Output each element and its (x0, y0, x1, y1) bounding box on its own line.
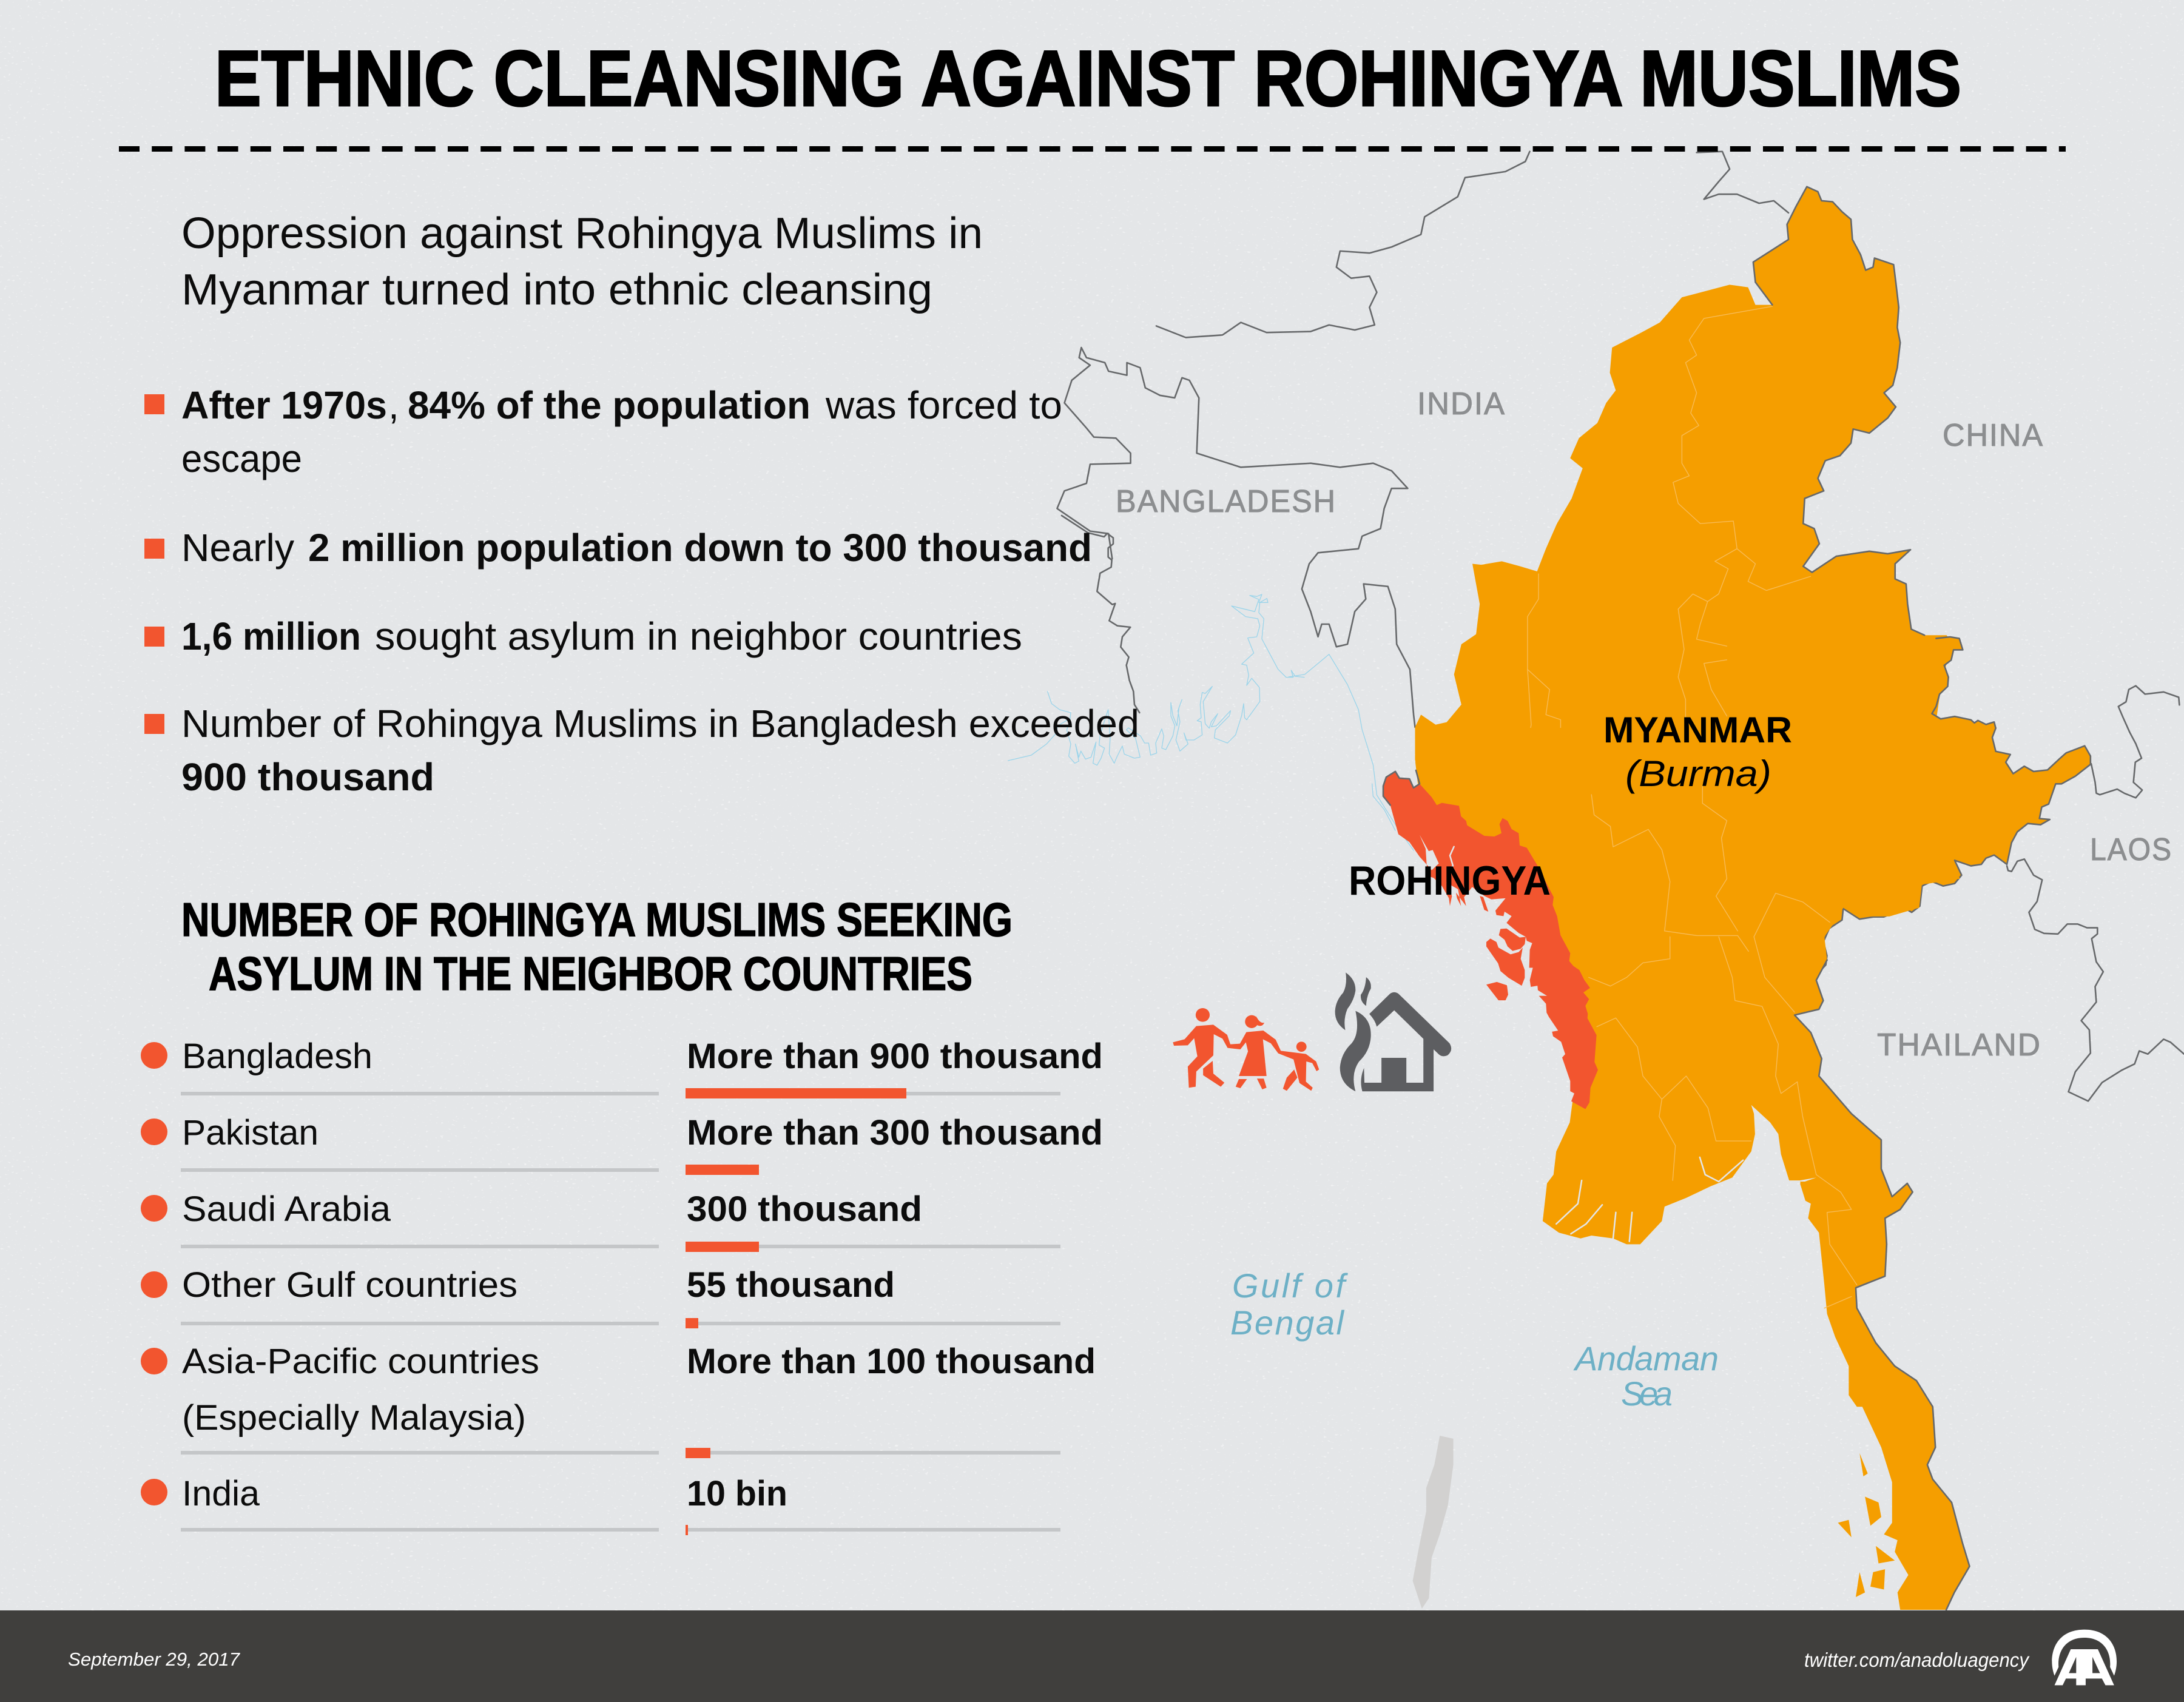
label: Myanmar: MYANMAR (1603, 710, 1792, 750)
row: Other Gulf countries: 55 thousand (687, 1265, 895, 1305)
row: Pakistan (141, 1113, 1103, 1175)
bullet: sought asylum: sought asylum in neighbor countries (375, 614, 1022, 658)
row: Saudi Arabia: 300 thousand (687, 1189, 922, 1229)
icon: burning house (1335, 972, 1451, 1091)
bullet: 84 percent forced to escape: After 1970s (181, 383, 387, 427)
label: Gulf of Bengal: Bengal (1230, 1303, 1345, 1342)
bullet: 84 percent forced to escape: escape (181, 437, 302, 480)
row: Pakistan: Pakistan (182, 1113, 318, 1152)
row: Other Gulf countries: Other Gulf countries (182, 1265, 517, 1305)
row: Other Gulf countries (141, 1265, 1060, 1328)
footer bar (0, 1610, 2184, 1702)
label: Burma: (Burma) (1625, 753, 1771, 794)
map (1008, 152, 2184, 1610)
footer date: September 29, 2017 (68, 1649, 241, 1670)
table heading: ASYLUM IN THE NEIGHBOR COUNTRIES (209, 947, 972, 1000)
row: Saudi Arabia: Saudi Arabia (182, 1189, 391, 1229)
icon: fleeing family (1173, 1008, 1319, 1091)
Rakhine coast water line (1289, 654, 1414, 850)
footer twitter handle: twitter.com/anadoluagency (1804, 1649, 2030, 1671)
label: Gulf of Bengal: Gulf of (1232, 1266, 1348, 1305)
icon: AA logo (2052, 1630, 2117, 1685)
label: India: INDIA (1417, 386, 1506, 422)
bullet: 84 percent forced to escape: was forced to (825, 383, 1062, 427)
row: Saudi Arabia (141, 1189, 1060, 1252)
Myanmar south (1413, 728, 1969, 1610)
row: Asia-Pacific countries: (Especially Malaysia) (182, 1398, 526, 1438)
row: India: 10 bin (687, 1474, 787, 1513)
row: Bangladesh: Bangladesh (182, 1037, 372, 1076)
row: Pakistan: More than 300 thousand (687, 1113, 1103, 1152)
bullet: Bangladesh number: 900 thousand (181, 755, 434, 799)
bullet: 84 percent forced to escape: , (388, 383, 399, 427)
label: Andaman Sea (1573, 1339, 1719, 1413)
label: Laos: LAOS (2090, 832, 2172, 867)
label: Gulf of Bengal (1230, 1266, 1348, 1342)
label: Rohingya: ROHINGYA (1349, 858, 1551, 904)
label: Andaman Sea: Andaman (1573, 1339, 1719, 1377)
Rohingya region in Rakhine (1372, 770, 1598, 1109)
bullet: population down: Nearly (181, 526, 294, 570)
row: Asia-Pacific countries (141, 1342, 1096, 1458)
row: Bangladesh (141, 1037, 1103, 1098)
Myanmar east (Shan state) (1727, 637, 2091, 971)
row: India: India (182, 1474, 260, 1513)
borders of China, Laos and Thailand (2007, 686, 2184, 1101)
intro text: Oppression against Rohingya Muslims in (181, 209, 983, 258)
table heading: NUMBER OF ROHINGYA MUSLIMS SEEKING (181, 893, 1013, 946)
title dashed divider (119, 146, 2066, 152)
bullet: 84 percent forced to escape: 84% of the population (408, 383, 811, 427)
row: India (141, 1474, 1060, 1535)
bullet: Bangladesh number (144, 702, 1139, 799)
bullet: sought asylum: 1,6 million (181, 614, 361, 658)
label: Andaman Sea: Sea (1621, 1374, 1673, 1413)
table heading (181, 893, 1013, 1000)
row: Bangladesh: More than 900 thousand (687, 1037, 1103, 1076)
bullet: Bangladesh number: Number of Rohingya Muslims in Bangladesh exceeded (181, 702, 1139, 745)
bullet: 84 percent forced to escape (144, 383, 1062, 480)
Myanmar north (1415, 187, 1954, 910)
bullet: population down: 2 million population down to 300 thousand (308, 526, 1092, 570)
row: Asia-Pacific countries: More than 100 thousand (687, 1342, 1096, 1381)
intro text (181, 209, 983, 314)
southern islands (1800, 1182, 1895, 1597)
label: China: CHINA (1943, 418, 2044, 453)
title: ETHNIC CLEANSING AGAINST ROHINGYA MUSLIMS (215, 34, 1961, 123)
label: Bangladesh: BANGLADESH (1116, 484, 1336, 519)
neighbouring country borders (north and west) (1057, 152, 1788, 727)
intro text: Myanmar turned into ethnic cleansing (181, 266, 932, 314)
row: Asia-Pacific countries: Asia-Pacific countries (182, 1342, 539, 1381)
Andaman islands (1413, 1436, 1454, 1609)
label: Thailand: THAILAND (1877, 1028, 2041, 1063)
Bangladesh east border and coastline (1008, 516, 1304, 765)
